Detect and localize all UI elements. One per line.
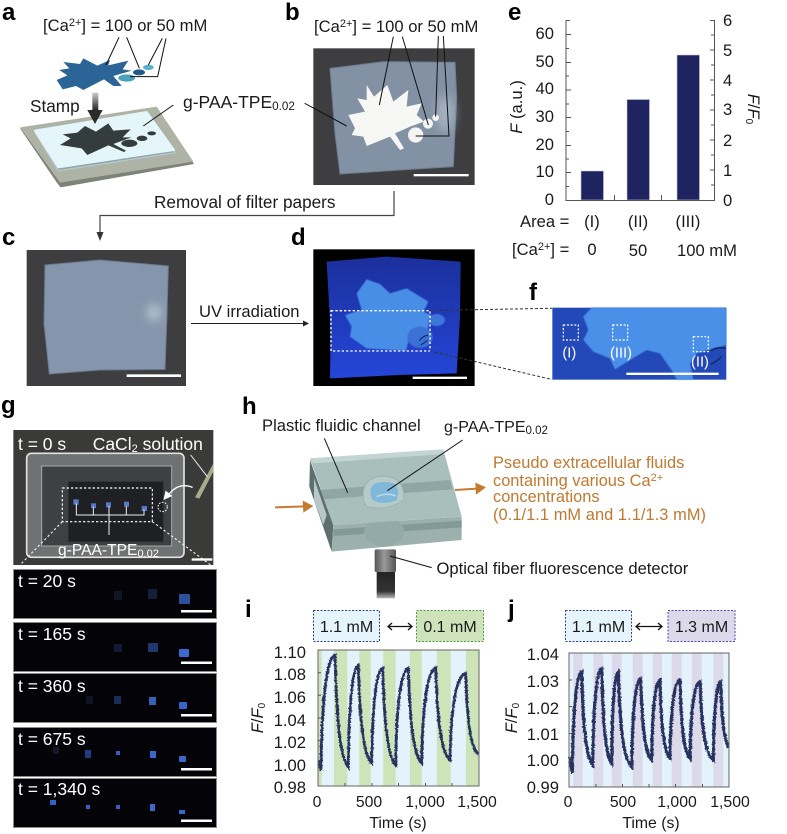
panel c: gel photo — [2, 224, 186, 386]
photo: transparent gel — [27, 250, 186, 386]
right axis labels: 1 — [723, 161, 732, 180]
legend box: 0.1 mM: 0.1 mM — [423, 619, 477, 636]
row: calcium labels: [Ca — [512, 240, 538, 259]
y axis labels — [274, 643, 306, 797]
row: area labels: Area = — [520, 212, 569, 231]
x axis labels — [564, 794, 750, 811]
frame: t = 1,340 s — [14, 778, 216, 828]
row: calcium labels: ] = — [550, 240, 569, 259]
y axis labels: 1.03 — [527, 672, 559, 691]
y axis labels: 1.10 — [274, 643, 306, 662]
label: gel name: g-PAA-TPE — [444, 419, 526, 436]
legend box: 1.3 mM — [668, 610, 735, 642]
label: gel name: g-PAA-TPE — [58, 542, 137, 559]
label: calcium concentration: [Ca — [43, 16, 69, 35]
label: gel name: 0.02 — [526, 425, 548, 437]
legend box: 0.1 mM — [416, 610, 484, 642]
right axis labels: 4 — [723, 71, 732, 90]
chart: fluorescence trace — [318, 650, 479, 786]
photo: magnified leaf region: (II) — [691, 355, 709, 371]
y axis labels: 1.02 — [527, 699, 559, 718]
arrow to panel c — [100, 191, 394, 234]
label: removal of filter papers: Removal of filter papers — [154, 192, 336, 212]
panel letter c: c — [2, 224, 15, 251]
y axis labels: 1.00 — [274, 756, 306, 775]
row: calcium labels: 50 — [629, 241, 647, 260]
frame: t = 675 s: t = 675 s — [18, 729, 86, 749]
label: pseudo extracellular fluids: Pseudo extracellular fluids — [493, 454, 684, 472]
panel b: stamped gel photo — [285, 0, 478, 185]
panel a: stamping schematic — [2, 0, 295, 187]
row: area labels — [520, 212, 700, 231]
x axis labels: 0 — [313, 794, 322, 811]
photo: magnified leaf region: (III) — [610, 345, 632, 361]
legend box: 1.1 mM — [314, 610, 380, 642]
label: calcium concentration: [Ca — [314, 17, 340, 36]
x axis labels: 1,500 — [457, 794, 497, 811]
y axis labels: 1.01 — [527, 725, 559, 744]
arrow to panel d — [191, 322, 305, 324]
row: area labels: (I) — [584, 212, 600, 231]
frame: t = 1,340 s: t = 1,340 s — [18, 779, 100, 799]
illustration: fluidic device — [275, 438, 486, 598]
left axis labels: 30 — [536, 107, 554, 126]
y axis title F/F0: F / F — [744, 94, 763, 119]
axes and ticks — [566, 20, 714, 200]
x axis labels: 1,000 — [657, 794, 697, 811]
panel letter j: j — [507, 596, 515, 623]
y axis title F: F (a.u.) — [507, 80, 526, 134]
panel letter h: h — [242, 393, 257, 420]
label: calcium concentration: ] = 100 or 50 mM — [352, 17, 478, 36]
label: pseudo extracellular fluids: concentrations — [493, 488, 600, 506]
label: CaCl2 solution: 2 — [132, 443, 138, 455]
left axis labels: 40 — [536, 79, 554, 98]
y axis title: 0 — [511, 702, 522, 708]
y axis labels: 1.08 — [274, 665, 306, 684]
x axis title: Time (s) — [369, 815, 427, 832]
label: calcium concentration: 2+ — [69, 17, 81, 29]
label: stamp: Stamp — [30, 96, 80, 116]
x axis labels: 1,500 — [710, 794, 750, 811]
label: t = 0 s: t = 0 s — [18, 434, 66, 454]
right axis labels: 6 — [723, 11, 732, 30]
panel letter d: d — [291, 224, 306, 251]
left axis labels: 50 — [536, 52, 554, 71]
label: pseudo extracellular fluids: (0.1/1.1 mM and 1.1/1.3 mM) — [493, 506, 706, 524]
row: area labels: (II) — [628, 212, 648, 231]
bars — [581, 55, 700, 200]
label: pseudo extracellular fluids: containing various Ca — [493, 472, 651, 490]
panel letter i: i — [245, 596, 252, 623]
label: optical fiber fluorescence detector: Optical fiber fluorescence detector — [436, 559, 689, 578]
frame: t = 360 s — [14, 674, 216, 722]
photo: blue leaf under UV — [313, 249, 475, 386]
illustration: stamp and gel plate — [20, 37, 194, 187]
left axis labels — [536, 24, 554, 209]
connector: removal of filter papers — [96, 191, 394, 241]
double arrow — [388, 623, 412, 630]
y axis title: 0 — [257, 702, 268, 708]
frame: t = 20 s: t = 20 s — [18, 571, 76, 591]
legend box: 1.1 mM — [566, 610, 632, 642]
y axis labels: 1.04 — [274, 711, 306, 730]
panel j: trace with 1.1 and 1.3 mM — [502, 596, 750, 832]
y axis title F/F0: 0 — [743, 119, 754, 125]
row: calcium labels: 100 mM — [677, 241, 737, 260]
y axis labels: 0.98 — [274, 778, 306, 797]
right axis labels: 5 — [723, 41, 732, 60]
photo: t = 0 s dish — [13, 430, 213, 565]
legend box: 1.3 mM: 1.3 mM — [675, 619, 728, 636]
x axis labels: 500 — [610, 794, 636, 811]
double arrow — [636, 623, 662, 630]
panel f: magnified fluorescence — [529, 279, 726, 380]
x axis labels: 500 — [356, 794, 382, 811]
chart: fluorescence trace — [569, 653, 729, 787]
y axis labels: 1.00 — [527, 751, 559, 770]
panel e: bar chart — [507, 0, 763, 260]
y axis labels: 1.04 — [527, 645, 559, 664]
right axis labels: 3 — [723, 100, 732, 119]
left axis labels: 60 — [536, 24, 554, 43]
y axis labels — [527, 645, 559, 797]
legend box: 1.1 mM: 1.1 mM — [572, 619, 625, 636]
panel d: fluorescent gel photo — [291, 224, 552, 386]
label: gel name: g-PAA-TPE — [183, 92, 272, 112]
photo: gel with white leaf — [305, 36, 475, 185]
panel g: time lapse photos — [1, 392, 216, 828]
label: pseudo extracellular fluids: 2+ — [651, 472, 663, 484]
row: calcium labels: 0 — [587, 240, 597, 259]
panel letter f: f — [529, 279, 538, 306]
label: CaCl2 solution: CaCl — [93, 434, 132, 454]
panel letter g: g — [1, 392, 16, 419]
x axis labels: 0 — [564, 794, 573, 811]
legend box: 1.1 mM: 1.1 mM — [320, 619, 373, 636]
label: calcium concentration: 2+ — [340, 18, 352, 30]
panel i: trace with 1.1 and 0.1 mM — [245, 596, 497, 832]
right axis labels — [723, 11, 732, 210]
left axis labels: 0 — [545, 190, 554, 209]
connector: UV irradiation — [191, 302, 309, 326]
left axis labels: 20 — [536, 135, 554, 154]
label: pseudo extracellular fluids — [493, 454, 706, 524]
frame: t = 360 s: t = 360 s — [18, 676, 86, 696]
frame: t = 165 s: t = 165 s — [18, 624, 86, 644]
x axis labels: 1,000 — [405, 794, 445, 811]
x axis title: Time (s) — [622, 815, 680, 832]
label: calcium concentration: ] = 100 or 50 mM — [81, 16, 207, 35]
photo: magnified leaf region — [552, 308, 726, 380]
y axis title: F/F — [248, 708, 267, 733]
right axis labels: 0 — [723, 191, 732, 210]
y axis labels: 0.99 — [527, 778, 559, 797]
y axis title: F/F — [502, 708, 521, 733]
x axis labels — [313, 794, 497, 811]
photo: magnified leaf region: (I) — [562, 345, 576, 361]
left axis labels: 10 — [536, 162, 554, 181]
y axis labels: 1.06 — [274, 688, 306, 707]
label: CaCl2 solution: solution — [138, 434, 203, 454]
row: area labels: (III) — [676, 212, 700, 231]
frame: t = 165 s — [14, 622, 216, 672]
label: gel name: 0.02 — [272, 100, 295, 113]
label: plastic fluidic channel: Plastic fluidic channel — [262, 416, 421, 435]
label: UV irradiation: UV irradiation — [199, 302, 300, 321]
row: calcium labels — [512, 240, 737, 260]
right axis labels: 2 — [723, 131, 732, 150]
panel h: fluidic channel schematic — [242, 393, 706, 598]
frame: t = 675 s — [14, 728, 216, 776]
y axis labels: 1.02 — [274, 733, 306, 752]
dotted zoom lines to panel f — [430, 308, 552, 380]
frame: t = 20 s — [14, 570, 216, 618]
label: gel name: 0.02 — [137, 548, 159, 560]
row: calcium labels: 2+ — [538, 241, 550, 253]
